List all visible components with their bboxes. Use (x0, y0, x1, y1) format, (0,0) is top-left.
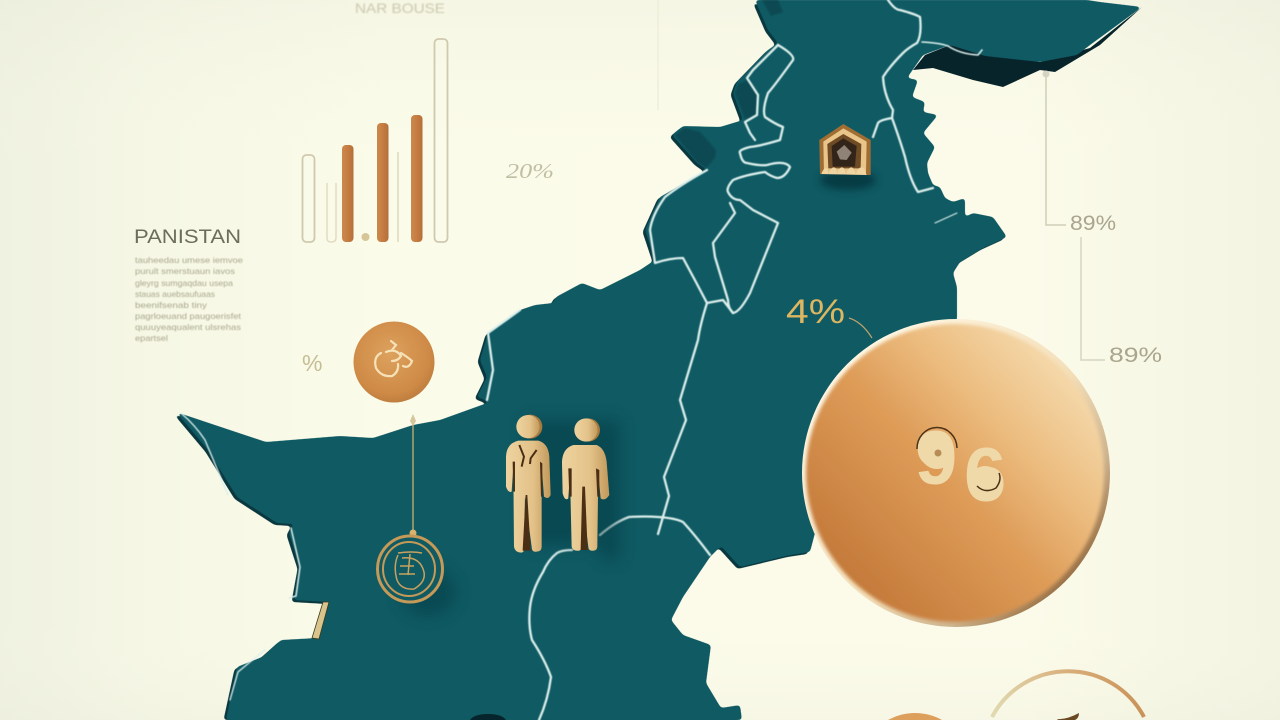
bottom small orange circle (888, 713, 942, 720)
provincial border lines (182, 0, 982, 720)
small orange circle with icon (354, 322, 434, 402)
right callout: first: 89% (1070, 212, 1116, 235)
people icons (506, 415, 620, 560)
person two (562, 418, 609, 551)
map extruded edge (174, 2, 1004, 720)
disc numeral counters (920, 435, 1000, 496)
disc value: 6 (964, 433, 1006, 518)
right callout: second (1081, 237, 1162, 367)
body text block: gleyrg sumgaqdau usepa (135, 278, 233, 288)
top caption: NAR BOUSE (355, 0, 445, 16)
right callout: second: 89% (1109, 344, 1162, 367)
pin connector line (410, 414, 416, 536)
body text block: pagrloeuand paugoerisfet (135, 311, 242, 321)
person one (506, 415, 551, 553)
4 percent label (786, 293, 872, 338)
large orange disc (802, 319, 1110, 627)
map land (176, 0, 1142, 720)
body text block: quuuyeaqualent ulsrehas (135, 322, 241, 332)
title: PANISTAN (134, 227, 241, 248)
map of the country (174, 0, 1142, 720)
bar chart (302, 39, 448, 242)
body text block: beenifsenab tiny (135, 300, 208, 310)
gold coastal sliver (312, 602, 329, 639)
body text block: stauas auebsaufuaas (135, 289, 215, 299)
bottom coastal dark notch (470, 714, 506, 720)
people shadow (525, 420, 620, 560)
body text block: tauheedau umese iemvoe (135, 255, 243, 265)
chart value label: 20% (506, 159, 554, 183)
darker north-west patches (675, 0, 783, 168)
bottom ring (992, 671, 1144, 720)
body text block: purult smerstuaun iavos (135, 266, 235, 276)
disc numeral details (917, 428, 1000, 491)
gold ring medallion (378, 536, 456, 616)
body text block (135, 255, 243, 343)
4 percent label: 4% (786, 293, 845, 331)
dark underside of northern arm (905, 7, 1142, 87)
left percent mark: % (302, 350, 322, 376)
house icon (819, 124, 876, 190)
body text block: epartsel (135, 333, 168, 343)
right callout: first (1042, 70, 1116, 235)
disc value: 9 (915, 416, 957, 501)
